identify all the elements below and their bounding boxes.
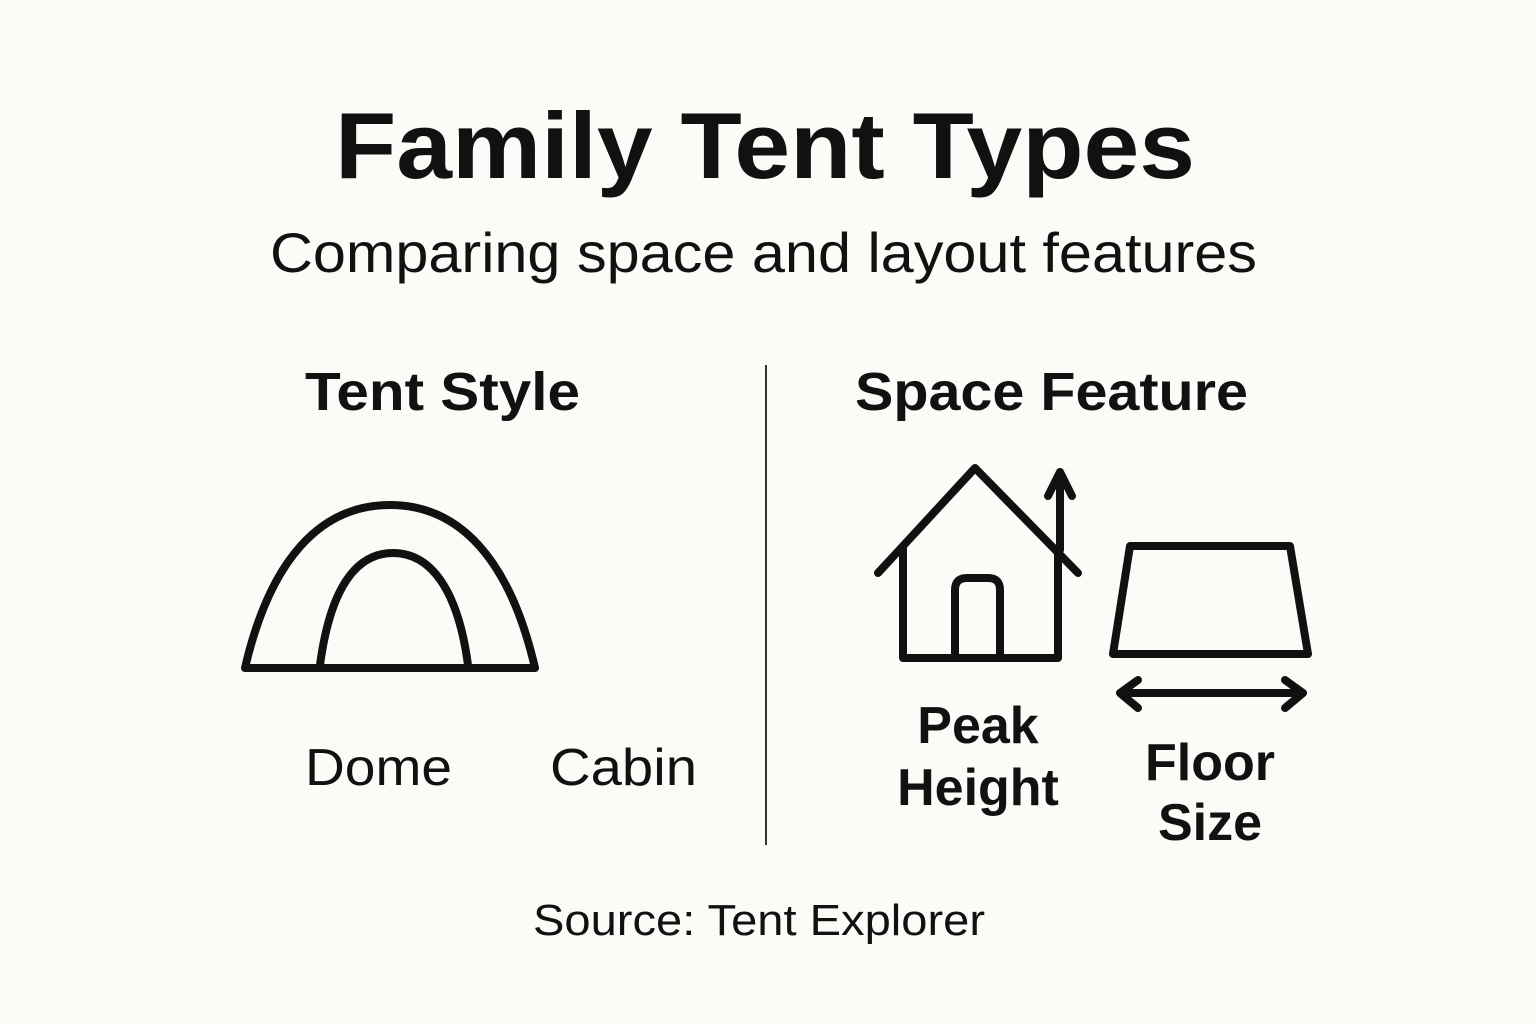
label: floor size: Floor [1145,734,1275,792]
text: Size [1158,794,1262,852]
text: Height [897,759,1059,817]
label: peak height: Peak [917,697,1039,755]
heading: space feature: Space Feature [855,362,1248,422]
label: dome: Dome [305,739,452,797]
source: Source: Tent Explorer [533,896,985,945]
title: Family Tent Types [335,93,1195,198]
icon: floor trapezoid with arrow [1113,546,1308,708]
label: cabin: Cabin [550,739,697,797]
icon: house with arrow [878,468,1078,658]
icon: dome tent [245,505,535,668]
subtitle: Comparing space and layout features [270,221,1257,284]
heading: tent style: Tent Style [305,362,580,422]
